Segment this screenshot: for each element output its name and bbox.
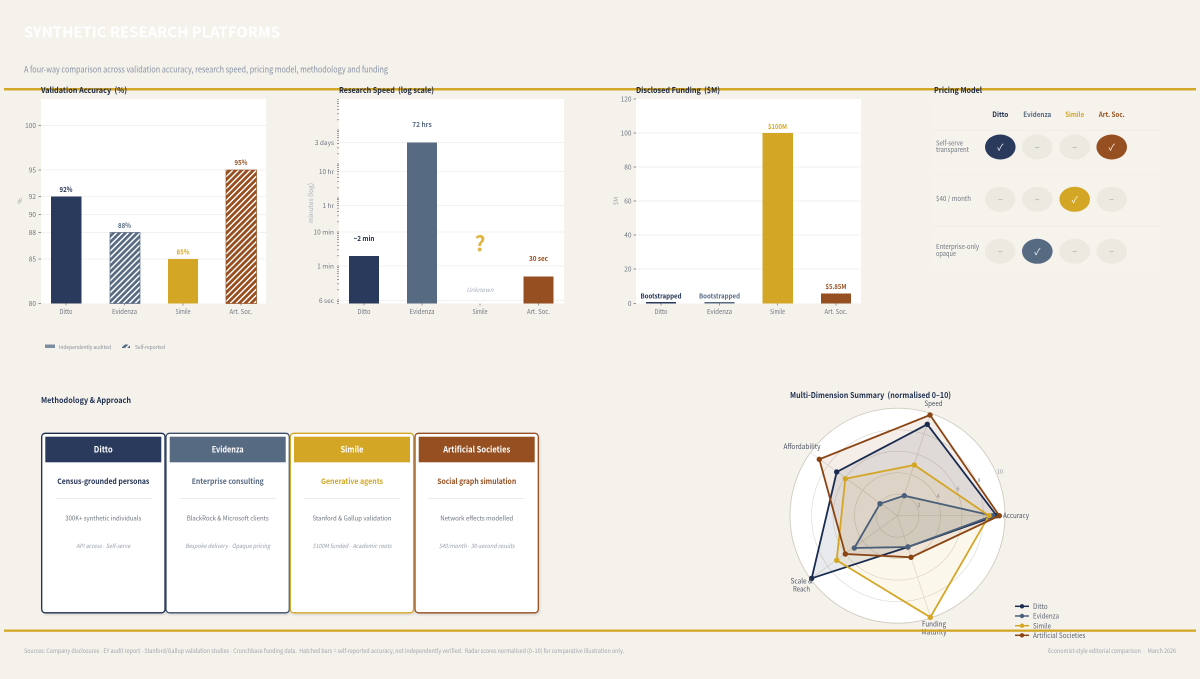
legend: Self-reported (135, 343, 165, 351)
card: Artificial Societies: $40/month · 30-second results (439, 541, 516, 550)
bottom gold rule (4, 630, 1196, 632)
y axis labels: 6 sec (319, 295, 335, 305)
title: SYNTHETIC RESEARCH PLATFORMS (24, 22, 280, 42)
panel: pricing model (932, 85, 1160, 269)
pricing row: 40 per month: ✓ (1072, 193, 1079, 206)
y axis labels: 100 (25, 120, 36, 130)
pricing row: self-serve: ✓ (1109, 140, 1116, 154)
subtitle: A four-way comparison across validation accuracy, research speed, pricing model, methodology and funding (24, 64, 388, 76)
pricing row: enterprise: ✓ (1034, 245, 1041, 258)
card: Evidenza (166, 433, 289, 613)
radar area fills (812, 415, 999, 617)
category labels: Simile (176, 306, 191, 316)
y axis labels: $M (611, 197, 620, 205)
radial tick labels: 4 (936, 492, 940, 500)
axis labels: Maturity (922, 628, 947, 638)
y axis labels: 90 (29, 209, 36, 219)
pricing row: self-serve: – (1035, 140, 1040, 153)
legend: Independently audited (59, 343, 111, 351)
y axis labels: 1 hr (322, 200, 334, 210)
bar values: Bootstrapped (640, 290, 682, 300)
radial tick labels: 2 (917, 501, 921, 509)
chart: research speed (305, 85, 564, 316)
pricing row labels (936, 138, 979, 258)
y axis labels: 92 (29, 191, 36, 201)
card: Ditto: Ditto (94, 444, 113, 456)
y axis labels (305, 137, 335, 305)
category labels: Evidenza (410, 306, 435, 316)
y axis labels: 120 (621, 94, 632, 104)
pricing row labels: transparent (936, 144, 969, 154)
chart title: Research Speed (log scale) (339, 85, 434, 96)
series: Evidenza (852, 493, 995, 551)
radar title: Multi-Dimension Summary (normalised 0–10) (790, 390, 951, 401)
footer sources: Sources: Company disclosures · EY audit report · Stanford/Gallup validation studies · Crunchbase funding data. Hatched bars = self-reported accuracy, not independently verified. Radar scores normalised (0–10) for comparative illustration only. (24, 646, 624, 655)
card: Evidenza: Evidenza (212, 444, 244, 456)
pricing row: 40 per month: – (1035, 192, 1040, 205)
card: Artificial Societies (415, 433, 538, 613)
pricing row labels: Self-serve (936, 138, 963, 148)
y axis labels (611, 94, 632, 308)
y axis labels: minutes (log) (305, 183, 315, 223)
card: Artificial Societies: Social graph simulation (437, 476, 516, 487)
pricing row: 40 per month: – (998, 192, 1003, 205)
category labels (60, 306, 253, 316)
card: Ditto: API access · Self-serve (76, 541, 131, 550)
card: Simile: Simile (340, 444, 364, 456)
y axis labels: 85 (29, 254, 36, 264)
axis labels (784, 399, 1029, 638)
bar values: Bootstrapped (699, 290, 740, 300)
bar values: 88% (118, 221, 131, 231)
axis labels: Funding (922, 620, 946, 630)
y axis labels: 0 (628, 298, 632, 308)
pricing column headers (992, 110, 1125, 120)
card: Evidenza: BlackRock & Microsoft clients (187, 512, 269, 522)
bar values: $5.85M (826, 281, 846, 291)
card: Artificial Societies: Network effects modelled (440, 512, 513, 522)
pricing row: enterprise: – (998, 244, 1003, 257)
axis labels: Reach (793, 584, 810, 594)
category labels: Art. Soc. (527, 306, 550, 316)
bar values: 85% (176, 248, 190, 258)
radar chart (784, 390, 1029, 638)
pricing row: self-serve (985, 134, 1127, 160)
chart: validation accuracy (15, 85, 266, 351)
axis labels: Accuracy (1003, 511, 1029, 521)
pricing row: self-serve: – (1072, 140, 1077, 153)
bar values: 72 hrs (412, 120, 432, 130)
series: Artificial Societies (817, 412, 1002, 560)
category labels: Simile (472, 306, 488, 316)
card: Ditto: Census-grounded personas (57, 476, 150, 487)
bars (646, 133, 851, 304)
card: Simile: $100M funded · Academic roots (312, 541, 393, 550)
category labels (358, 306, 550, 316)
bar values: 92% (60, 185, 73, 195)
card: Simile: Stanford & Gallup validation (312, 512, 392, 522)
legend (45, 343, 165, 351)
radial tick labels: 10 (997, 468, 1003, 476)
pricing row labels: Enterprise-only (936, 241, 979, 251)
y axis labels: 80 (29, 298, 36, 308)
y axis labels: 80 (624, 162, 632, 172)
card: Simile (290, 433, 414, 613)
pricing row: self-serve: ✓ (997, 140, 1004, 154)
bar values: $100M (768, 121, 787, 131)
y axis labels: % (15, 198, 24, 204)
bar values (60, 158, 248, 258)
card: Simile: Generative agents (321, 476, 383, 487)
pricing row: enterprise (985, 239, 1127, 264)
category labels: Ditto (60, 306, 72, 316)
radar legend: Simile (1033, 621, 1051, 631)
bar values: 30 sec (529, 254, 548, 264)
category labels: Ditto (654, 306, 668, 316)
series: Ditto (809, 422, 999, 581)
pricing column headers: Simile (1065, 110, 1084, 120)
card: Ditto (42, 433, 165, 613)
radar legend: Artificial Societies (1033, 631, 1086, 641)
methodology heading: Methodology & Approach (41, 395, 131, 406)
category labels: Evidenza (112, 306, 137, 316)
axis labels: Scale & (790, 576, 813, 586)
category labels (654, 306, 848, 316)
y axis labels: 40 (624, 230, 632, 240)
pricing column headers: Ditto (992, 110, 1009, 120)
chart title: Validation Accuracy (%) (40, 85, 127, 96)
y axis labels: 95 (29, 164, 36, 174)
bar values: 95% (234, 158, 248, 168)
category labels: Art. Soc. (230, 306, 253, 316)
top gold rule (4, 88, 1196, 90)
bars (349, 142, 554, 304)
y axis labels: 10 hr (319, 166, 334, 176)
radar legend (1015, 602, 1086, 641)
bar values (354, 120, 548, 294)
series: Simile (834, 462, 992, 620)
axis labels: Speed (924, 399, 942, 409)
card: Evidenza: Enterprise consulting (192, 476, 264, 487)
y axis labels: 20 (624, 264, 632, 274)
card: Evidenza: Bespoke delivery · Opaque pricing (185, 541, 271, 550)
radar legend: Evidenza (1033, 612, 1059, 622)
y axis labels: 100 (621, 128, 632, 138)
category labels: Simile (770, 306, 785, 316)
radial tick labels: 6 (956, 484, 960, 492)
radial tick labels: 8 (977, 476, 981, 484)
category labels: Evidenza (707, 306, 732, 316)
pricing row labels: $40 / month (936, 193, 971, 203)
bars (51, 170, 256, 304)
pricing row: 40 per month (985, 187, 1127, 212)
footer credit: Economist-style editorial comparison · March 2026 (1048, 646, 1176, 655)
y axis labels: 88 (29, 227, 36, 237)
radar legend: Ditto (1033, 602, 1048, 612)
pricing row labels: opaque (936, 248, 956, 258)
pricing title: Pricing Model (934, 85, 982, 96)
bar values: ? (475, 228, 485, 258)
axis labels: Affordability (784, 442, 821, 452)
pricing row: enterprise: – (1109, 244, 1114, 257)
bar values (640, 121, 846, 300)
pricing column headers: Art. Soc. (1098, 110, 1125, 120)
y axis labels: 3 days (315, 137, 334, 147)
y axis labels: 10 min (314, 226, 334, 236)
y axis labels: 60 (624, 196, 632, 206)
chart title: Disclosed Funding ($M) (636, 85, 720, 96)
pricing row: 40 per month: – (1109, 192, 1114, 205)
y axis labels (15, 120, 36, 308)
card: Artificial Societies: Artificial Societies (442, 444, 510, 456)
radial tick labels (917, 468, 1003, 509)
category labels: Ditto (358, 306, 370, 316)
card: Ditto: 300K+ synthetic individuals (65, 512, 141, 522)
y axis labels: 1 min (317, 260, 334, 270)
pricing column headers: Evidenza (1023, 110, 1051, 120)
category labels: Art. Soc. (824, 306, 848, 316)
chart: disclosed funding (611, 85, 861, 316)
bar values: Unknown (466, 285, 494, 294)
bar values: ~2 min (354, 234, 374, 244)
pricing row: enterprise: – (1072, 244, 1077, 257)
